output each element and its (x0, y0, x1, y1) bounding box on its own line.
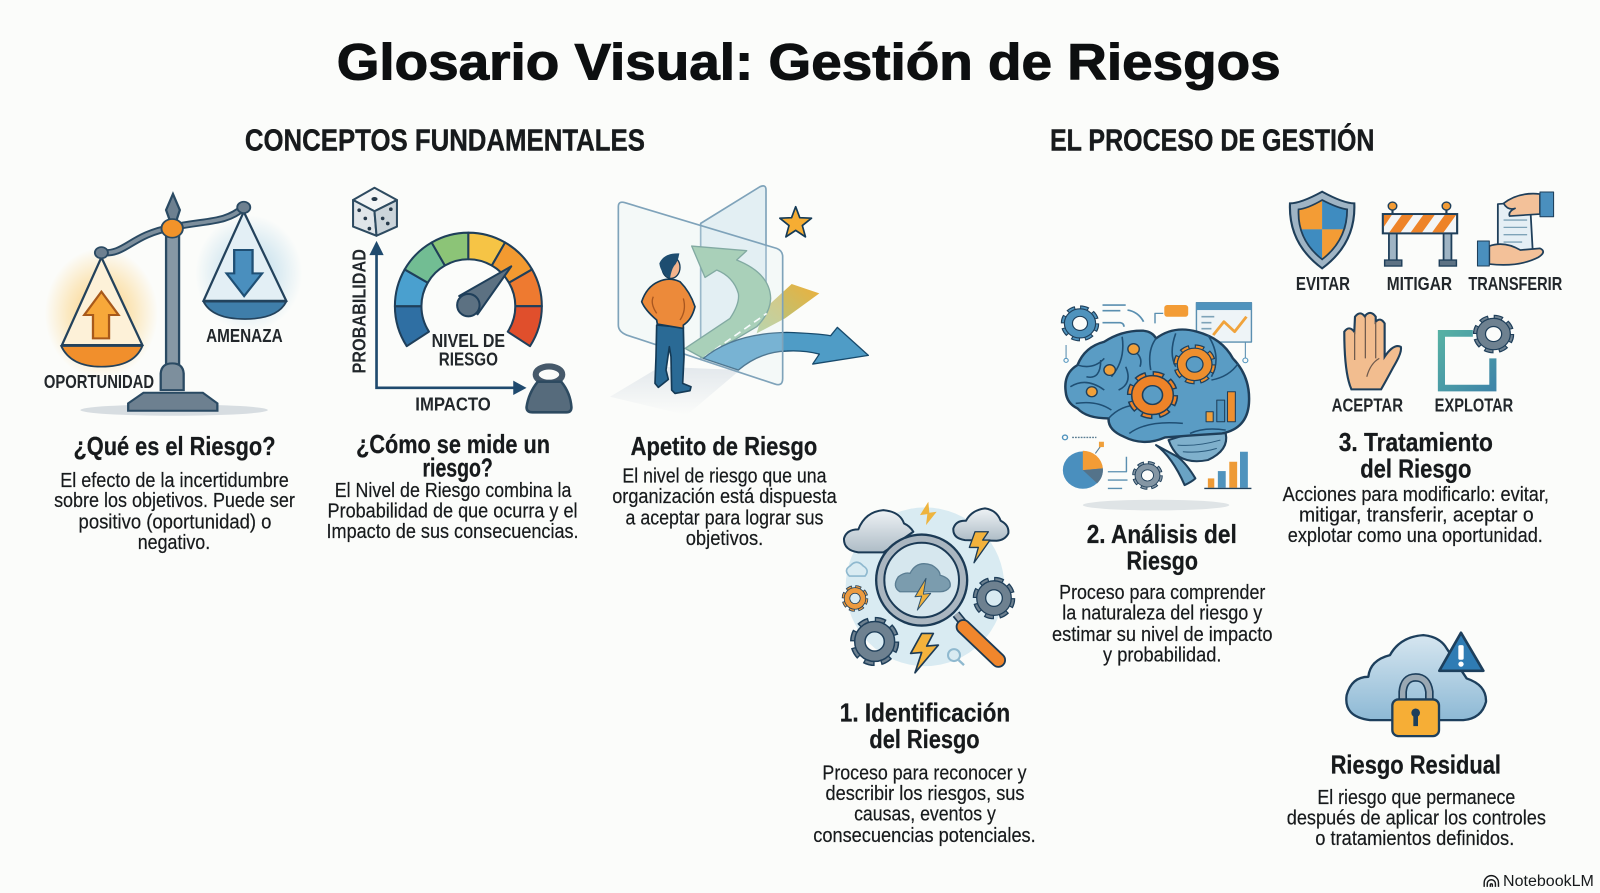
heading: identificación del riesgo: 1. Identificación (840, 700, 1010, 728)
icon: balanza oportunidad y amenaza (45, 194, 302, 416)
text block: análisis: y probabilidad. (1103, 644, 1221, 666)
panel: qué es el riesgo (44, 194, 302, 554)
heading: tratamiento del riesgo: 3. Tratamiento (1339, 429, 1493, 457)
icon: lupa, nubes y engranajes (844, 502, 1011, 673)
text block: análisis: Proceso para comprender (1059, 582, 1265, 604)
text block: definición de riesgo: sobre los objetivos. Puede ser (54, 490, 295, 512)
heading: cómo se mide un riesgo: ¿Cómo se mide un (356, 431, 550, 459)
label: nivel de riesgo: NIVEL DE (432, 330, 505, 351)
heading: cómo se mide un riesgo: riesgo? (422, 455, 493, 483)
panel: análisis del riesgo (1052, 303, 1272, 666)
icon: mano aceptar (1344, 313, 1401, 389)
panel: apetito de riesgo (610, 186, 868, 550)
heading: qué es el riesgo: ¿Qué es el Riesgo? (73, 433, 276, 461)
label: explotar: EXPLOTAR (1435, 394, 1513, 415)
icon: explotar cuadro y engranaje (1441, 319, 1510, 388)
title: Glosario Visual: Gestión de Riesgos (337, 34, 1281, 91)
text block: tratamiento: explotar como una oportunidad. (1288, 525, 1543, 547)
label: aceptar: ACEPTAR (1332, 394, 1403, 415)
text block: definición de riesgo: El efecto de la incertidumbre (60, 470, 289, 492)
label: probabilidad: PROBABILIDAD (348, 249, 369, 374)
text block: definición de apetito: a aceptar para lograr sus (626, 508, 823, 530)
text block: análisis: estimar su nivel de impacto (1052, 624, 1272, 646)
icon: manos transferir (1478, 192, 1554, 266)
icon: medidor nivel de riesgo (395, 233, 542, 346)
text block: definición de riesgo: positivo (oportunidad) o (79, 512, 271, 534)
text block: nivel de riesgo: El Nivel de Riesgo combina la (335, 480, 572, 502)
icon: logo notebooklm (1484, 876, 1498, 887)
panel: tratamiento del riesgo (1283, 192, 1562, 547)
heading: riesgo residual: Riesgo Residual (1331, 752, 1501, 780)
heading: análisis del riesgo: Riesgo (1127, 547, 1198, 575)
text block: riesgo residual: El riesgo que permanece (1317, 787, 1515, 809)
label: evitar: EVITAR (1296, 273, 1350, 294)
text block: nivel de riesgo: Probabilidad de que ocurra y el (328, 500, 578, 522)
label: impacto: IMPACTO (415, 393, 491, 414)
text block: definición de apetito: organización está dispuesta (612, 486, 837, 508)
text block: definición de apetito: objetivos. (686, 528, 763, 550)
text block: identificación: Proceso para reconocer y (822, 763, 1027, 785)
text block: tratamiento (1283, 484, 1549, 547)
label: nivel de riesgo: RIESGO (439, 348, 498, 369)
text block: riesgo residual: después de aplicar los controles (1287, 808, 1546, 830)
text block: identificación (813, 763, 1036, 847)
label: amenaza: AMENAZA (206, 325, 283, 346)
section heading: el proceso de gestión: EL PROCESO DE GESTIÓN (1050, 122, 1374, 158)
label: transferir: TRANSFERIR (1468, 273, 1562, 294)
heading: identificación del riesgo (840, 700, 1010, 754)
text block: identificación: causas, eventos y (854, 804, 997, 826)
heading: análisis del riesgo: 2. Análisis del (1087, 521, 1237, 549)
text block: definición de riesgo (54, 470, 295, 554)
icon: persona ante paneles y caminos (610, 186, 868, 415)
heading: identificación del riesgo: del Riesgo (869, 726, 980, 754)
heading: apetito de riesgo: Apetito de Riesgo (631, 433, 817, 461)
section heading: conceptos fundamentales: CONCEPTOS FUNDAMENTALES (245, 124, 645, 158)
text block: análisis: la naturaleza del riesgo y (1062, 602, 1263, 624)
text block: tratamiento: Acciones para modificarlo: evitar, (1283, 484, 1549, 506)
label: oportunidad: OPORTUNIDAD (44, 371, 154, 392)
icon: barrera mitigar (1383, 202, 1457, 266)
text block: nivel de riesgo: Impacto de sus consecuencias. (327, 521, 579, 543)
text block: definición de apetito (612, 466, 837, 550)
panel: identificación del riesgo (813, 502, 1036, 847)
text block: identificación: consecuencias potenciales. (813, 825, 1036, 847)
label: nivel de riesgo (432, 330, 505, 369)
icon: escudo evitar (1290, 192, 1354, 268)
heading: tratamiento del riesgo (1339, 429, 1493, 484)
heading: análisis del riesgo (1087, 521, 1237, 575)
label: mitigar: MITIGAR (1387, 273, 1452, 294)
text block: identificación: describir los riesgos, sus (826, 783, 1024, 805)
icon: dado (353, 188, 397, 236)
text block: tratamiento: mitigar, transferir, aceptar o (1299, 505, 1534, 527)
panel: cómo se mide un riesgo (327, 188, 579, 543)
text block: nivel de riesgo (327, 480, 579, 543)
text block: definición de apetito: El nivel de riesgo que una (622, 466, 827, 488)
panel: riesgo residual (1287, 633, 1546, 850)
icon: pesa (527, 366, 571, 412)
text block: riesgo residual (1287, 787, 1546, 850)
heading: tratamiento del riesgo: del Riesgo (1360, 456, 1471, 484)
text block: análisis (1052, 582, 1272, 666)
heading: cómo se mide un riesgo (356, 431, 550, 483)
icon: nube con candado y alerta (1346, 633, 1486, 736)
text block: riesgo residual: o tratamientos definidos. (1315, 828, 1514, 850)
icon: ejes probabilidad e impacto (369, 241, 527, 395)
text block: definición de riesgo: negativo. (138, 532, 210, 554)
watermark: notebooklm: NotebookLM (1503, 873, 1594, 890)
icon: cerebro con engranajes y gráficos (1062, 303, 1251, 510)
